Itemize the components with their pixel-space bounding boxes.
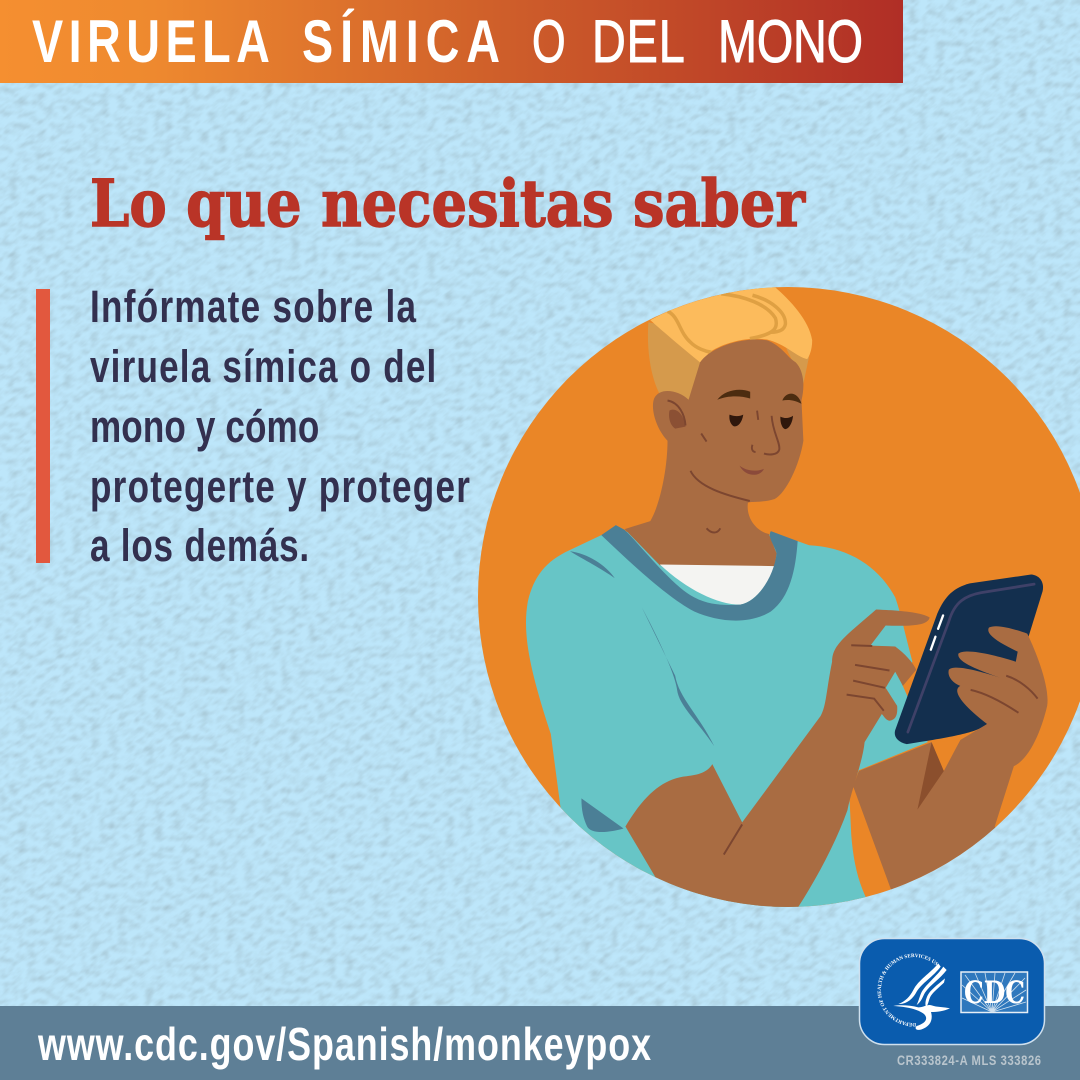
face details (668, 390, 801, 533)
main heading: Lo que necesitas saber (90, 166, 806, 242)
shirt folds (570, 551, 714, 832)
near arm and pointing hand (626, 610, 930, 907)
HHS eagle (893, 963, 950, 1030)
illustration: person using a phone in an orange circle (470, 280, 1080, 943)
body text: protegerte y proteger (90, 461, 470, 512)
body text: Infórmate sobre la (90, 281, 417, 332)
body text: mono y cómo (90, 401, 319, 452)
campaign codes: CR333824-A MLS 333826 (897, 1053, 1041, 1068)
header title: VIRUELA (32, 8, 270, 75)
collar and undershirt (601, 525, 798, 621)
far arm and hand (854, 626, 1048, 890)
head and neck (625, 339, 803, 567)
body text: a los demás. (90, 520, 309, 571)
accent bar (36, 289, 50, 563)
shirt (526, 532, 928, 907)
phone (895, 575, 1043, 744)
header title: MONO (718, 8, 863, 75)
body text: viruela símica o del (90, 341, 436, 392)
footer band (0, 1006, 1080, 1080)
website url: www.cdc.gov/Spanish/monkeypox (37, 1019, 651, 1070)
HHS seal text: DEPARTMENT OF HEALTH & HUMAN SERVICES USA (878, 954, 938, 1026)
CDC box: CDC (964, 975, 1025, 1011)
body text (90, 281, 470, 571)
header title (32, 8, 863, 76)
header banner (0, 0, 903, 83)
hair (648, 287, 812, 400)
header title: SÍMICA (302, 8, 500, 75)
header title: DEL (592, 8, 685, 75)
orange circle (470, 280, 1080, 920)
header title: O (532, 9, 566, 76)
